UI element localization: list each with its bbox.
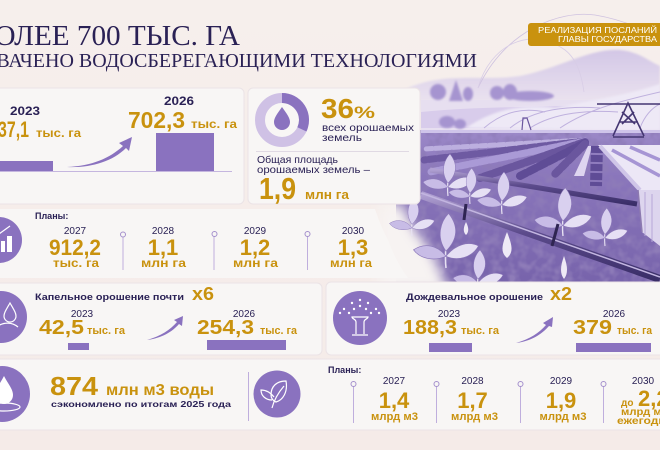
panel: water saved and plans: млрд м3 [451,411,498,423]
panel: water saved and plans: 2027 [383,376,406,387]
panel: share of irrigated land: 36 [321,93,354,124]
panel: plans to 2030, hectares [0,209,408,278]
arrow: drip growth [147,316,183,340]
panel: share of irrigated land: всех орошаемых [322,123,414,134]
fade edge [378,204,450,292]
panel: sprinkler irrigation: 2023 [438,309,461,320]
panel: share of irrigated land: % [354,103,375,122]
panel: share of irrigated land: 1,9 [259,171,296,206]
panel: sprinkler irrigation: тыс. га [617,325,653,337]
drip pipe [421,193,660,279]
panel: water saved and plans: 1,9 [546,388,576,413]
panel: water saved and plans: 2030 [632,376,655,387]
panel: plans to 2030, hectares: 912,2 [49,235,101,260]
icon: leaf [254,370,300,418]
pivot tower [597,103,660,137]
panel: water saved and plans: Планы: [328,365,361,375]
panel: drip irrigation: тыс. га [260,325,298,337]
panel: water saved and plans: 1,4 [379,388,410,413]
panel: drip irrigation: х6 [192,284,214,304]
panel: sprinkler irrigation: тыс. га [461,325,500,337]
tag: realization: ГЛАВЫ ГОСУДАРСТВА [558,34,657,44]
panel: water saved and plans: 2029 [550,376,573,387]
panel: sprinkler irrigation: 379 [573,317,612,339]
panel: plans to 2030, hectares: млн га [233,256,278,270]
illustration: irrigated field landscape [378,14,660,292]
panel: plans to 2030, hectares: тыс. га [53,256,99,270]
panel: drip irrigation [0,283,322,355]
panel: sprinkler irrigation: х2 [550,284,572,304]
panel: share of irrigated land: Общая площадь [257,154,339,166]
panel: drip irrigation: 2026 [233,309,256,320]
title [0,20,477,72]
arrow: sprinkler growth [516,317,553,343]
icon: drip [0,291,27,343]
panel: water saved and plans [0,359,660,430]
panel: water saved and plans: 2028 [461,376,484,387]
panel: plans to 2030, hectares: 1,2 [240,235,270,260]
panel: share of irrigated land: млн га [305,187,350,202]
panel: drip irrigation: 2023 [71,309,94,320]
panel: drip irrigation: Капельное орошение почти [35,292,184,303]
tag: realization [528,23,660,46]
panel: share of irrigated land: земель [322,133,362,144]
panel: sprinkler irrigation: Дождевальное орошение [406,292,543,303]
icon: growth chart [0,217,22,263]
panel: share of irrigated land [248,88,420,206]
panel: water saved and plans: 874 [50,371,99,401]
panel: growth 2023-2026: 2023 [10,104,40,118]
panel: growth 2023-2026 [0,88,244,204]
panel: plans to 2030, hectares: 2029 [244,226,267,237]
panel: plans to 2030, hectares: Планы: [35,211,68,221]
arrow: growth [67,137,132,167]
panel: sprinkler irrigation [326,282,660,355]
sprinkler spray [466,84,660,130]
icon: sprinkler [333,291,387,345]
panel: growth 2023-2026: 702,3 [128,107,185,133]
panel: water saved and plans: млрд м3 [540,411,586,423]
panel: plans to 2030, hectares: млн га [141,256,186,270]
panel: water saved and plans: 1,7 [457,388,488,413]
panel: drip irrigation: тыс. га [87,325,126,337]
panel: drip irrigation: 42,5 [39,317,84,339]
panel: plans to 2030, hectares: 1,1 [148,235,178,260]
panel: water saved and plans: до [621,398,633,409]
panel: drip irrigation: 254,3 [197,317,254,339]
panel: growth 2023-2026: тыс. га [36,126,81,140]
panel: sprinkler irrigation: 188,3 [403,317,457,339]
tag: realization: РЕАЛИЗАЦИЯ ПОСЛАНИЙ [538,24,657,35]
icon: water drop [0,366,30,422]
panel: water saved and plans: млн м3 воды [106,382,214,399]
panel: plans to 2030, hectares: 1,3 [338,235,368,260]
panel: plans to 2030, hectares: 2030 [342,226,365,237]
panel: plans to 2030, hectares: 2027 [64,226,87,237]
panel: share of irrigated land: орошаемых земель – [257,164,370,176]
panel: plans to 2030, hectares: млн га [330,256,372,270]
panel: growth 2023-2026: 2026 [164,94,194,108]
panel: sprinkler irrigation: 2026 [603,309,626,320]
panel: plans to 2030, hectares: 2028 [152,226,175,237]
panel: water saved and plans: млрд м3 [371,411,418,423]
panel: growth 2023-2026: тыс. га [191,117,237,131]
donut chart [260,98,304,142]
panel: water saved and plans: сэкономлено по итогам 2025 года [51,399,231,409]
